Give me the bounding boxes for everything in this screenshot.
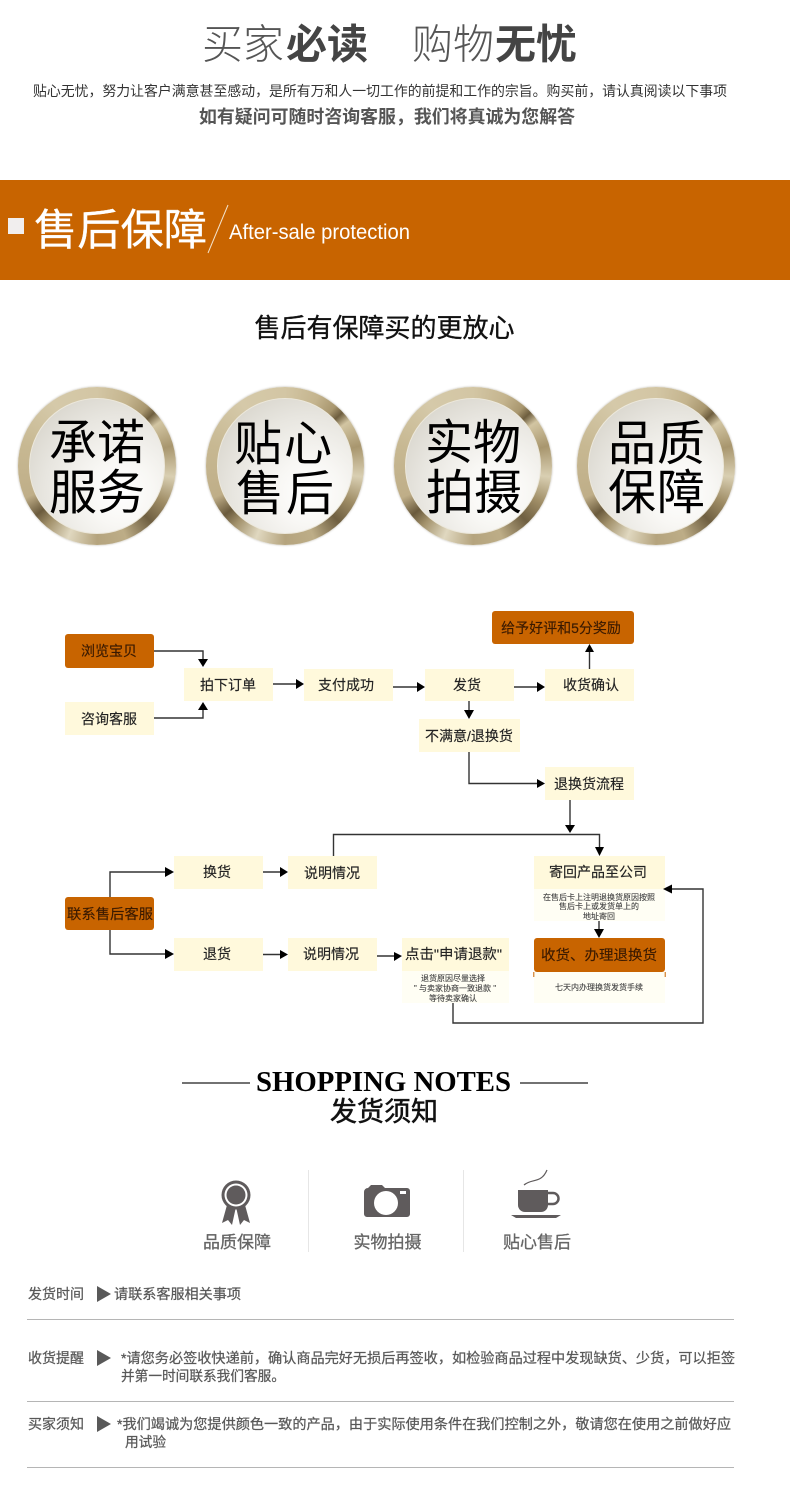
badge: promise service: 承诺: [49, 417, 145, 470]
section heading: 售后有保障买的更放心: [254, 313, 515, 343]
arrow: consult to order: [154, 702, 208, 718]
title: [202, 22, 577, 68]
note: send back: 在售后卡上注明退换货原因按照: [543, 892, 655, 902]
box: apply refund: 点击"申请退款": [405, 946, 502, 962]
badge: real photos: 拍摄: [426, 467, 522, 520]
banner: after-sale protection: [0, 180, 790, 280]
note: send back: 售后卡上或发货单上的: [559, 901, 639, 911]
arrow: pay to ship: [393, 682, 425, 692]
arrow: ship to unsatisfied: [464, 701, 474, 719]
box: consult: 咨询客服: [81, 711, 137, 727]
box: consult: [65, 702, 154, 735]
banner: after-sale protection: After-sale protection: [229, 221, 410, 244]
box: refund: 退货: [203, 946, 231, 962]
icon labels: 品质保障: [203, 1233, 271, 1252]
note: receiving reminder: 并第一时间联系我们客服。: [121, 1368, 285, 1384]
arrow: unsatisfied to return flow: [469, 752, 545, 788]
box: browse: 浏览宝贝: [81, 643, 137, 659]
note: buyer notice: 买家须知: [28, 1416, 84, 1432]
icon: camera: [364, 1185, 410, 1217]
arrow: return flow down: [565, 800, 575, 833]
arrow: order to pay: [273, 679, 304, 689]
note: seven days: [534, 972, 665, 1003]
box: apply refund: [402, 938, 509, 971]
note: refund reason: 退货原因尽量选择: [421, 973, 485, 983]
note: shipping time: 发货时间: [28, 1286, 84, 1302]
arrow: contact to exchange: [110, 867, 174, 897]
badge: real photos: [394, 387, 552, 545]
badge: caring after-sale: [206, 387, 364, 545]
title: 买家: [202, 22, 284, 68]
box: exchange: 换货: [203, 864, 231, 880]
box: contact service: [65, 897, 154, 930]
box: send back: [534, 856, 665, 889]
badge: quality guarantee: [577, 387, 735, 545]
icon labels: 实物拍摄: [354, 1233, 422, 1252]
box: ship: [425, 669, 514, 701]
arrow: confirm to reward: [585, 644, 594, 669]
box: explain exchange: 说明情况: [304, 865, 360, 881]
note: receiving reminder: *请您务必签收快递前，确认商品完好无损后再签收，如检验商品过程中发现缺货、少货，可以拒签: [121, 1350, 735, 1366]
badge: caring after-sale: 贴心: [234, 418, 334, 471]
box: pay: [304, 669, 393, 701]
icon: rosette: [222, 1180, 250, 1225]
arrow: ship to confirm: [514, 682, 545, 692]
note: shipping time: [28, 1286, 241, 1302]
box: handle return: 收货、办理退换货: [541, 947, 657, 963]
box: explain refund: 说明情况: [303, 946, 359, 962]
arrow: send back to handle: [594, 921, 604, 938]
box: handle return: [534, 938, 665, 972]
box: unsatisfied: 不满意/退换货: [425, 728, 513, 744]
icon labels: [203, 1233, 571, 1252]
flowchart: purchase flow: [65, 611, 634, 856]
badge: quality guarantee: 品质: [608, 418, 706, 471]
note: send back: [534, 889, 665, 921]
badge: real photos: 实物: [425, 417, 521, 470]
arrow: refund to explain: [263, 950, 288, 959]
note: refund reason: [402, 971, 509, 1003]
box: order: 拍下订单: [200, 677, 256, 693]
title: 无忧: [495, 22, 577, 68]
box: ship: 发货: [453, 677, 481, 693]
badge: promise service: [18, 387, 176, 545]
icon labels: 贴心售后: [503, 1233, 571, 1252]
note: buyer notice: [28, 1416, 731, 1450]
note: receiving reminder: 收货提醒: [28, 1350, 84, 1366]
note: buyer notice: *我们竭诚为您提供颜色一致的产品，由于实际使用条件在我们控制之外，敬请您在使用之前做好应: [117, 1416, 731, 1432]
note: receiving reminder: [28, 1350, 735, 1384]
box: return flow: [545, 767, 634, 800]
box: reward: [492, 611, 634, 644]
box: contact service: 联系售后客服: [67, 906, 153, 922]
heading: shipping notice: 发货须知: [330, 1097, 438, 1127]
box: explain exchange: [288, 856, 377, 889]
heading: shopping notes: SHOPPING NOTES: [256, 1066, 511, 1098]
box: order: [184, 668, 273, 701]
badge: promise service: 服务: [49, 467, 145, 520]
box: reward: 给予好评和5分奖励: [501, 620, 621, 636]
box: browse: [65, 634, 154, 668]
note: refund reason: " 与卖家协商一致退款 ": [414, 983, 496, 993]
box: confirm: [545, 669, 634, 701]
note: shipping time: 请联系客服相关事项: [114, 1286, 241, 1302]
box: refund: [174, 938, 263, 971]
intro bold line: 如有疑问可随时咨询客服，我们将真诚为您解答: [199, 106, 575, 127]
box: exchange: [174, 856, 263, 889]
badge: quality guarantee: 保障: [608, 467, 706, 520]
box: explain refund: [288, 938, 377, 971]
box: unsatisfied: [419, 719, 520, 752]
arrow: exchange to send back: [334, 834, 604, 856]
arrow: explain to apply refund: [377, 952, 402, 961]
title: 必读: [286, 22, 368, 68]
note: send back: 地址寄回: [583, 911, 615, 921]
note: buyer notice: 用试验: [125, 1434, 166, 1450]
box: confirm: 收货确认: [563, 677, 619, 693]
box: return flow: 退换货流程: [554, 776, 624, 792]
arrow: contact to refund: [110, 930, 174, 959]
arrow: exchange to explain: [263, 867, 288, 877]
banner: after-sale protection: 售后保障: [34, 207, 207, 255]
note: seven days: 七天内办理换货发货手续: [555, 982, 643, 992]
box: send back: 寄回产品至公司: [549, 864, 647, 880]
box: pay: 支付成功: [318, 677, 374, 693]
badge: caring after-sale: 售后: [236, 468, 336, 521]
flowchart: after-sale flow: [65, 856, 703, 1023]
arrow: refund loop back: [453, 884, 703, 1023]
note: refund reason: 等待卖家确认: [429, 993, 477, 1003]
title: 购物: [412, 22, 494, 68]
icon: coffee cup: [511, 1170, 561, 1218]
arrow: browse to order: [154, 651, 208, 667]
intro text: 贴心无忧，努力让客户满意甚至感动，是所有万和人一切工作的前提和工作的宗旨。购买前，请认真阅读以下事项: [33, 83, 727, 99]
